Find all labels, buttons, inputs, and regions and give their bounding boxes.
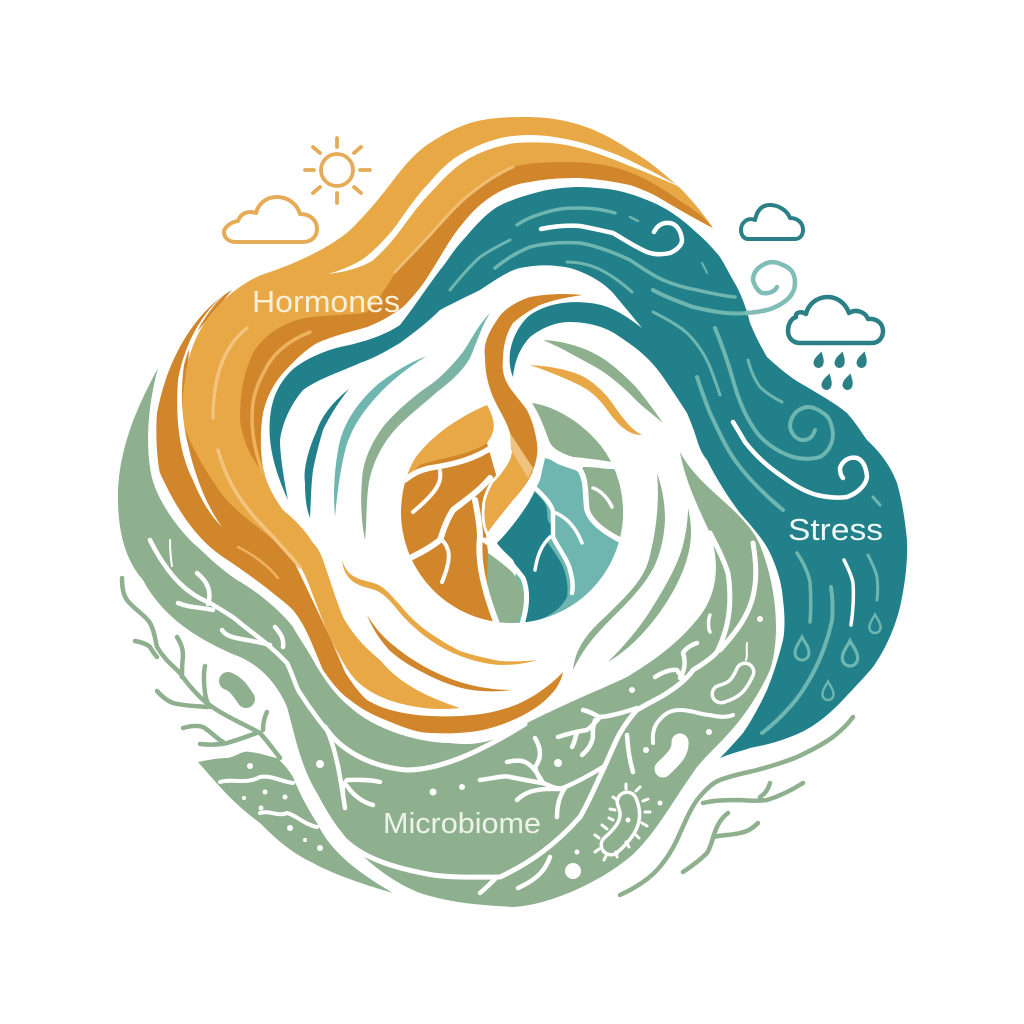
green right leaf [583,467,623,540]
interior light orange stroke [342,560,537,665]
panel: dark orange upper layer [240,162,713,472]
light teal blade [334,356,427,517]
dark orange left segment [401,443,496,622]
microbiome band [118,368,853,907]
panel: green main body [118,368,776,907]
title labels [252,285,883,840]
right outer branches [620,717,853,895]
dark teal core [497,492,568,625]
pale highlight on stem [510,433,533,478]
light streaks on orange [213,167,513,578]
panel: light orange main [182,117,713,709]
label: Stress: Stress [788,512,883,547]
right thin green blade A [573,473,665,670]
left outer branches [122,578,280,758]
icon: orange cloud [224,197,317,242]
icon: sun [305,138,370,203]
icon: outlined bacterium with tail [721,643,747,694]
interior dark orange stroke [367,615,512,691]
base segments [401,403,623,623]
lower stem highlight [485,435,533,532]
green upper leaf [532,403,612,462]
light teal right segment [506,458,623,623]
white roots [405,445,622,624]
teal blade [305,389,349,518]
right green stroke [543,340,663,423]
label: Hormones: Hormones [252,285,400,319]
teal light streaks [450,208,880,733]
icon: spiky bacterium [595,784,650,860]
green bottom leaf [487,553,525,625]
label: Microbiome: Microbiome [383,808,541,840]
right thin green blade B [608,508,691,662]
light orange leaf [405,405,494,478]
icon: teal rain drops outlined [795,615,881,700]
icon: small teal cloud [741,205,803,239]
icon: white bean bacterium [663,742,680,769]
panel: dark orange lower layer [156,290,563,733]
white swirls in teal [541,223,867,625]
white branches in upper green [150,533,756,893]
icon: rain cloud [788,297,883,343]
hormones band [156,117,713,733]
stress band [270,187,907,758]
panel: green lower slab [198,752,393,893]
interior tapered strokes [305,313,691,670]
white highlights on orange [177,135,682,527]
panel: teal main [270,187,907,758]
dots [242,616,763,879]
icon: rain drops [812,350,869,391]
green and teal long stroke [361,313,490,540]
central root circle [401,294,623,623]
central stem [485,294,583,532]
right orange stroke [530,365,642,435]
icon: teal swirl [747,262,795,313]
icon: green bean [228,681,246,699]
